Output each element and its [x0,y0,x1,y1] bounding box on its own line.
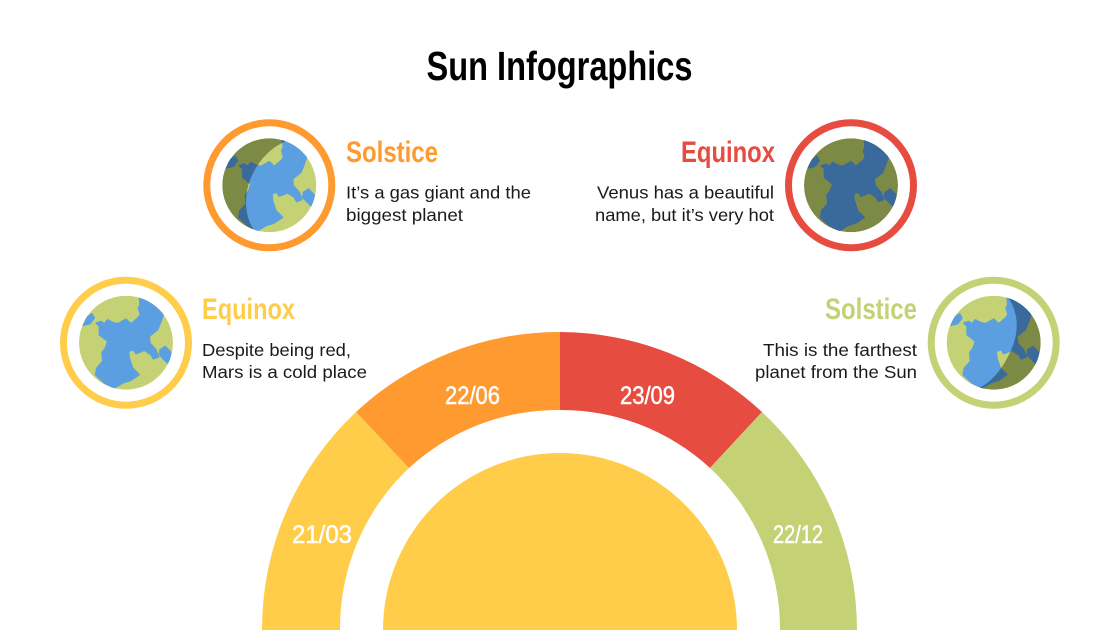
text: Solstice description: This is the farthest [763,340,917,360]
text: Equinox description: Despite being red, [202,340,351,360]
text: Equinox description: Venus has a beautiful [597,182,774,202]
panel: solstice 22/06 [207,123,531,248]
arc segment: 22/12: 22/12 [773,521,823,549]
text: Solstice description: biggest planet [346,205,463,225]
arc segment: 21/03 [262,412,409,630]
text: Solstice description: It’s a gas giant and the [346,182,531,202]
icon: green ring globe [931,280,1056,405]
icon: yellow ring globe [64,280,188,405]
arc segment: 23/09: 23/09 [620,382,675,410]
sun [383,453,737,630]
heading: Solstice: Solstice [346,136,438,169]
heading: Equinox: Equinox [681,136,775,169]
chart: sun arc [262,332,857,630]
heading: Equinox: Equinox [202,293,295,326]
panel: equinox 21/03 [64,280,367,405]
heading: Solstice: Solstice [825,293,917,326]
arc segment: 22/12 [710,412,857,630]
icon: red ring globe [788,123,914,248]
arc segment: 21/03: 21/03 [292,521,352,549]
text: Equinox description: name, but it’s very hot [595,205,774,225]
panel: equinox 23/09 [595,123,914,248]
title: Sun Infographics [426,43,692,89]
arc segment: 23/09 [560,332,762,468]
icon: orange ring globe [207,123,332,248]
arc segment: 22/06 [356,332,560,468]
panel: solstice 22/12 [755,280,1056,405]
text: Equinox description: Mars is a cold place [202,362,367,382]
arc segment: 22/06: 22/06 [445,382,500,410]
text: Solstice description: planet from the Sun [755,362,917,382]
